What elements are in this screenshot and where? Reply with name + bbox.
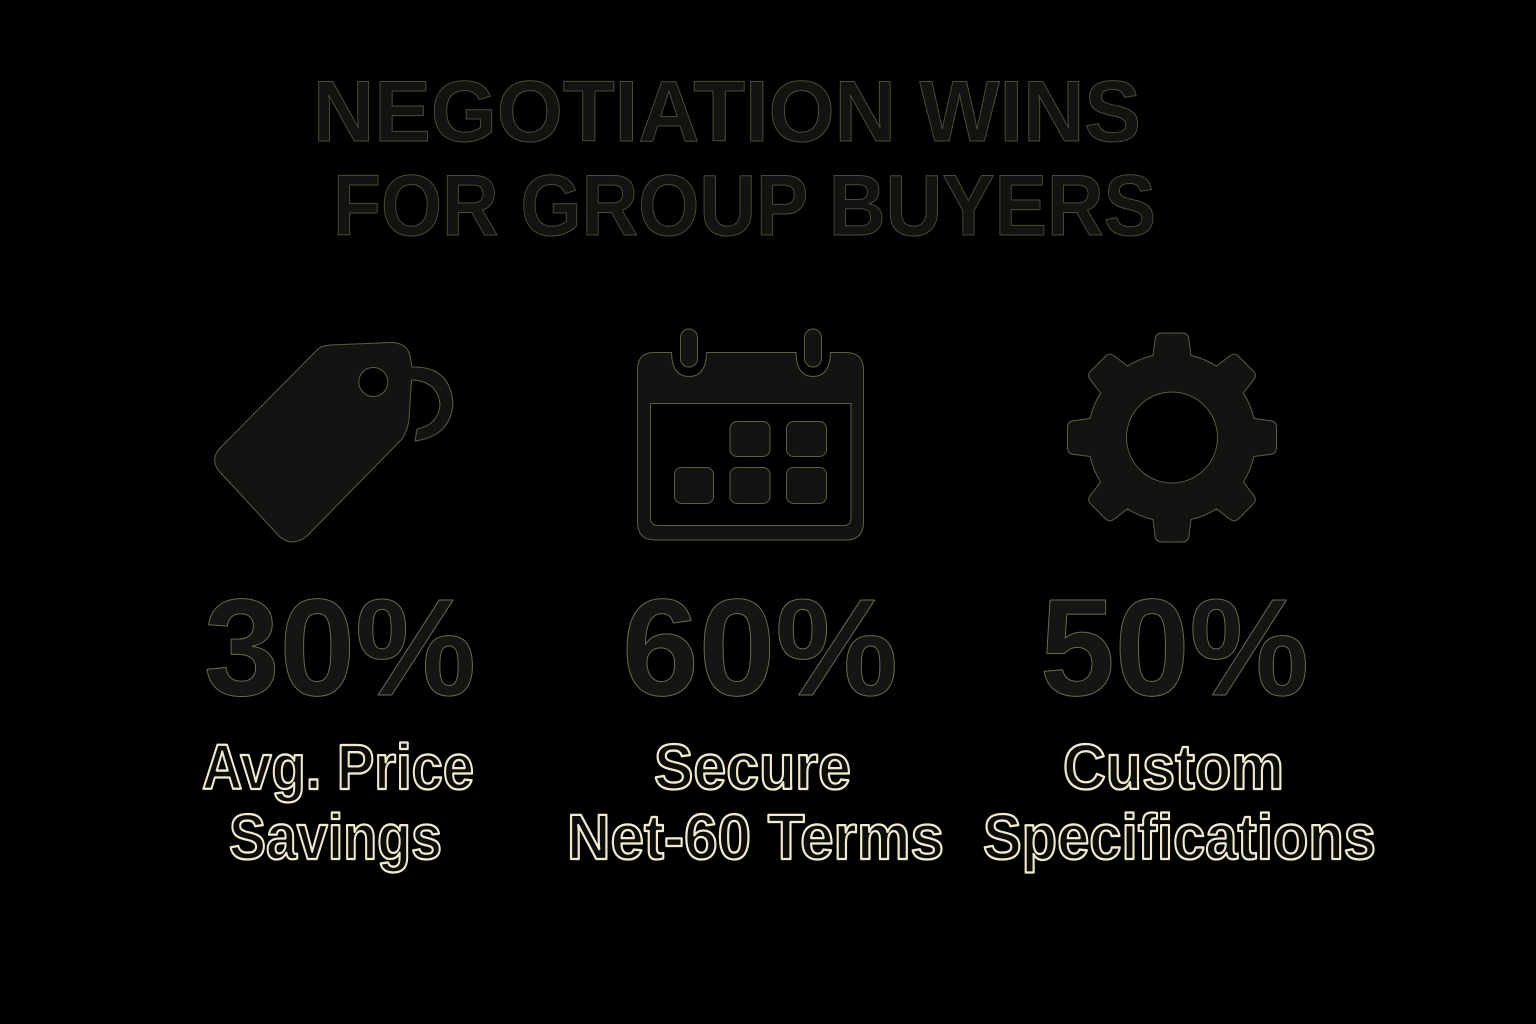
title: FOR GROUP BUYERS — [333, 158, 1156, 254]
label: Secure Net-60 Terms — [567, 731, 944, 873]
panel: price savings — [202, 342, 476, 873]
stat: 30%: 30% — [204, 571, 476, 725]
stat: 60%: 60% — [622, 571, 898, 725]
label: Avg. Price Savings: Savings — [229, 801, 442, 873]
panel: custom specifications — [983, 333, 1376, 873]
stat: 50%: 50% — [1040, 571, 1309, 725]
label: Secure Net-60 Terms: Net-60 Terms — [567, 801, 944, 873]
label: Avg. Price Savings: Avg. Price — [202, 731, 474, 803]
label: Custom Specifications — [983, 731, 1376, 873]
title: NEGOTIATION WINS — [313, 64, 1141, 160]
label: Secure Net-60 Terms: Secure — [654, 731, 851, 803]
label: Custom Specifications: Custom — [1063, 731, 1284, 803]
icon: gear — [1068, 333, 1276, 542]
icon: calendar — [638, 329, 864, 540]
title — [313, 64, 1156, 254]
panel: net-60 terms — [567, 329, 944, 873]
label: Avg. Price Savings — [202, 731, 474, 873]
icon: price tag — [215, 342, 453, 542]
label: Custom Specifications: Specifications — [983, 801, 1376, 873]
